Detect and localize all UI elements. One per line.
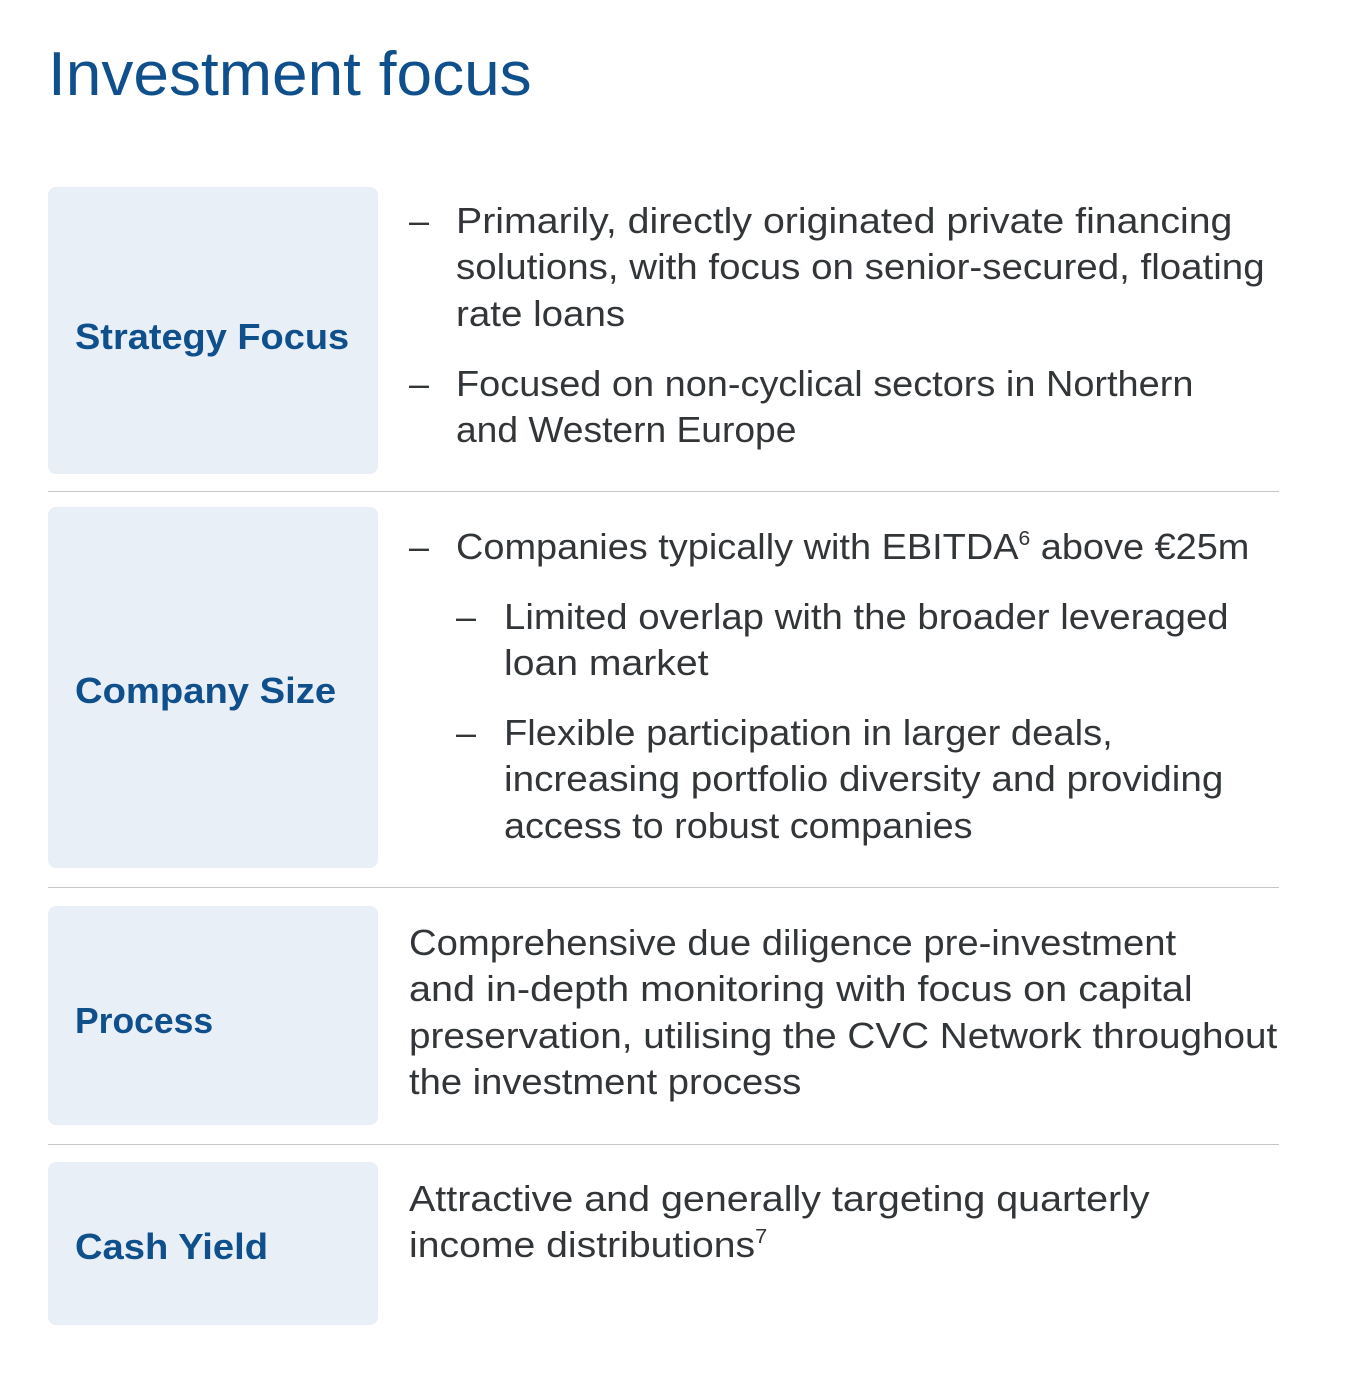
text: company sub-bullet 2 <box>504 712 1223 846</box>
icon: strategy dash 2: – <box>409 363 429 404</box>
heading: strategy focus: Strategy Focus <box>75 316 349 357</box>
heading: cash yield: Cash Yield <box>75 1226 268 1267</box>
text: cash yield description: income distributions7 <box>409 1224 767 1265</box>
icon: strategy dash 1: – <box>409 200 429 241</box>
text: process description: and in-depth monitoring with focus on capital <box>409 968 1193 1009</box>
text: process description <box>409 922 1277 1102</box>
text: company sub-bullet 2: increasing portfolio diversity and providing <box>504 758 1223 799</box>
panel: company size label <box>48 507 378 868</box>
panel: strategy focus label <box>48 187 378 474</box>
text: company sub-bullet 1: Limited overlap with the broader leveraged <box>504 596 1229 637</box>
icon: company dash 1: – <box>409 526 429 567</box>
text: strategy bullet 2: and Western Europe <box>456 409 796 450</box>
text: company sub-bullet 1: loan market <box>504 642 708 683</box>
text: company sub-bullet 2: Flexible participation in larger deals, <box>504 712 1113 753</box>
text: strategy bullet 1: rate loans <box>456 293 625 334</box>
text: process description: preservation, utilising the CVC Network throughout <box>409 1015 1277 1056</box>
text: strategy bullet 1 <box>456 200 1265 334</box>
heading: process: Process <box>75 1000 213 1041</box>
text: cash yield description: Attractive and generally targeting quarterly <box>409 1178 1150 1219</box>
icon: company sub dash 1: – <box>456 596 476 637</box>
title: Investment focus <box>48 40 532 109</box>
text: strategy bullet 2: Focused on non-cyclical sectors in Northern <box>456 363 1193 404</box>
text: process description: the investment process <box>409 1061 801 1102</box>
text: process description: Comprehensive due diligence pre-investment <box>409 922 1176 963</box>
text: company bullet 1: Companies typically with EBITDA6 above €25m <box>456 526 1249 567</box>
text: strategy bullet 2 <box>456 363 1193 450</box>
text: cash yield description <box>409 1178 1150 1265</box>
text: company sub-bullet 2: access to robust companies <box>504 805 973 846</box>
panel: cash yield label <box>48 1162 378 1325</box>
icon: company sub dash 2: – <box>456 712 476 753</box>
panel: process label <box>48 906 378 1125</box>
heading: company size: Company Size <box>75 670 336 711</box>
text: strategy bullet 1: solutions, with focus on senior-secured, floating <box>456 246 1265 287</box>
text: company sub-bullet 1 <box>504 596 1229 683</box>
text: strategy bullet 1: Primarily, directly originated private financing <box>456 200 1232 241</box>
